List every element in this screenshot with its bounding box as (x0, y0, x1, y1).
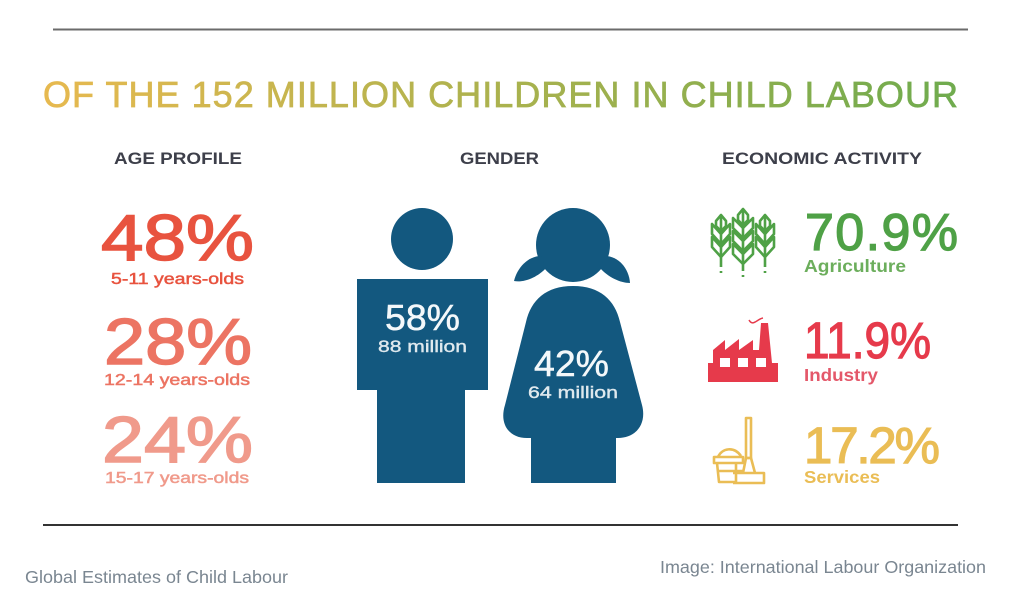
stat: 48%: 5-11 years-olds (111, 271, 244, 288)
stat: agriculture: Agriculture (804, 256, 906, 276)
boy stat: 58% (385, 297, 460, 338)
icon: factory (708, 318, 778, 382)
heading: economic activity: ECONOMIC ACTIVITY (722, 150, 922, 168)
icon: wheat (712, 209, 774, 277)
icon: girl figure (503, 208, 643, 483)
image credit: Image: International Labour Organization (660, 557, 986, 577)
icon: services tools (714, 418, 764, 483)
panel: age profile (101, 150, 254, 487)
stat: agriculture: 70.9% (805, 204, 958, 262)
girl stat: 64 million (528, 383, 618, 402)
boy stat: 88 million (378, 337, 467, 356)
stat: services: 17.2% (804, 417, 940, 474)
stat: services: Services (804, 467, 880, 487)
stat: 28%: 12-14 years-olds (104, 372, 250, 389)
stat: 24%: 15-17 years-olds (105, 470, 249, 487)
stat: 24%: 24% (102, 403, 253, 476)
icon: boy figure (357, 208, 488, 483)
stat: industry: 11.9% (804, 312, 931, 369)
panel: economic activity (708, 150, 958, 487)
title: OF THE 152 MILLION CHILDREN IN CHILD LABOUR (43, 74, 958, 115)
stat: 48%: 48% (101, 201, 254, 274)
girl stat (528, 343, 618, 402)
caption: Global Estimates of Child Labour (25, 567, 288, 587)
heading: age profile: AGE PROFILE (114, 150, 242, 168)
boy stat (378, 297, 467, 356)
heading: gender: GENDER (460, 150, 539, 168)
panel: gender (357, 150, 643, 483)
stat: 28%: 28% (104, 305, 252, 378)
girl stat: 42% (534, 343, 609, 384)
stat: industry: Industry (804, 365, 878, 385)
